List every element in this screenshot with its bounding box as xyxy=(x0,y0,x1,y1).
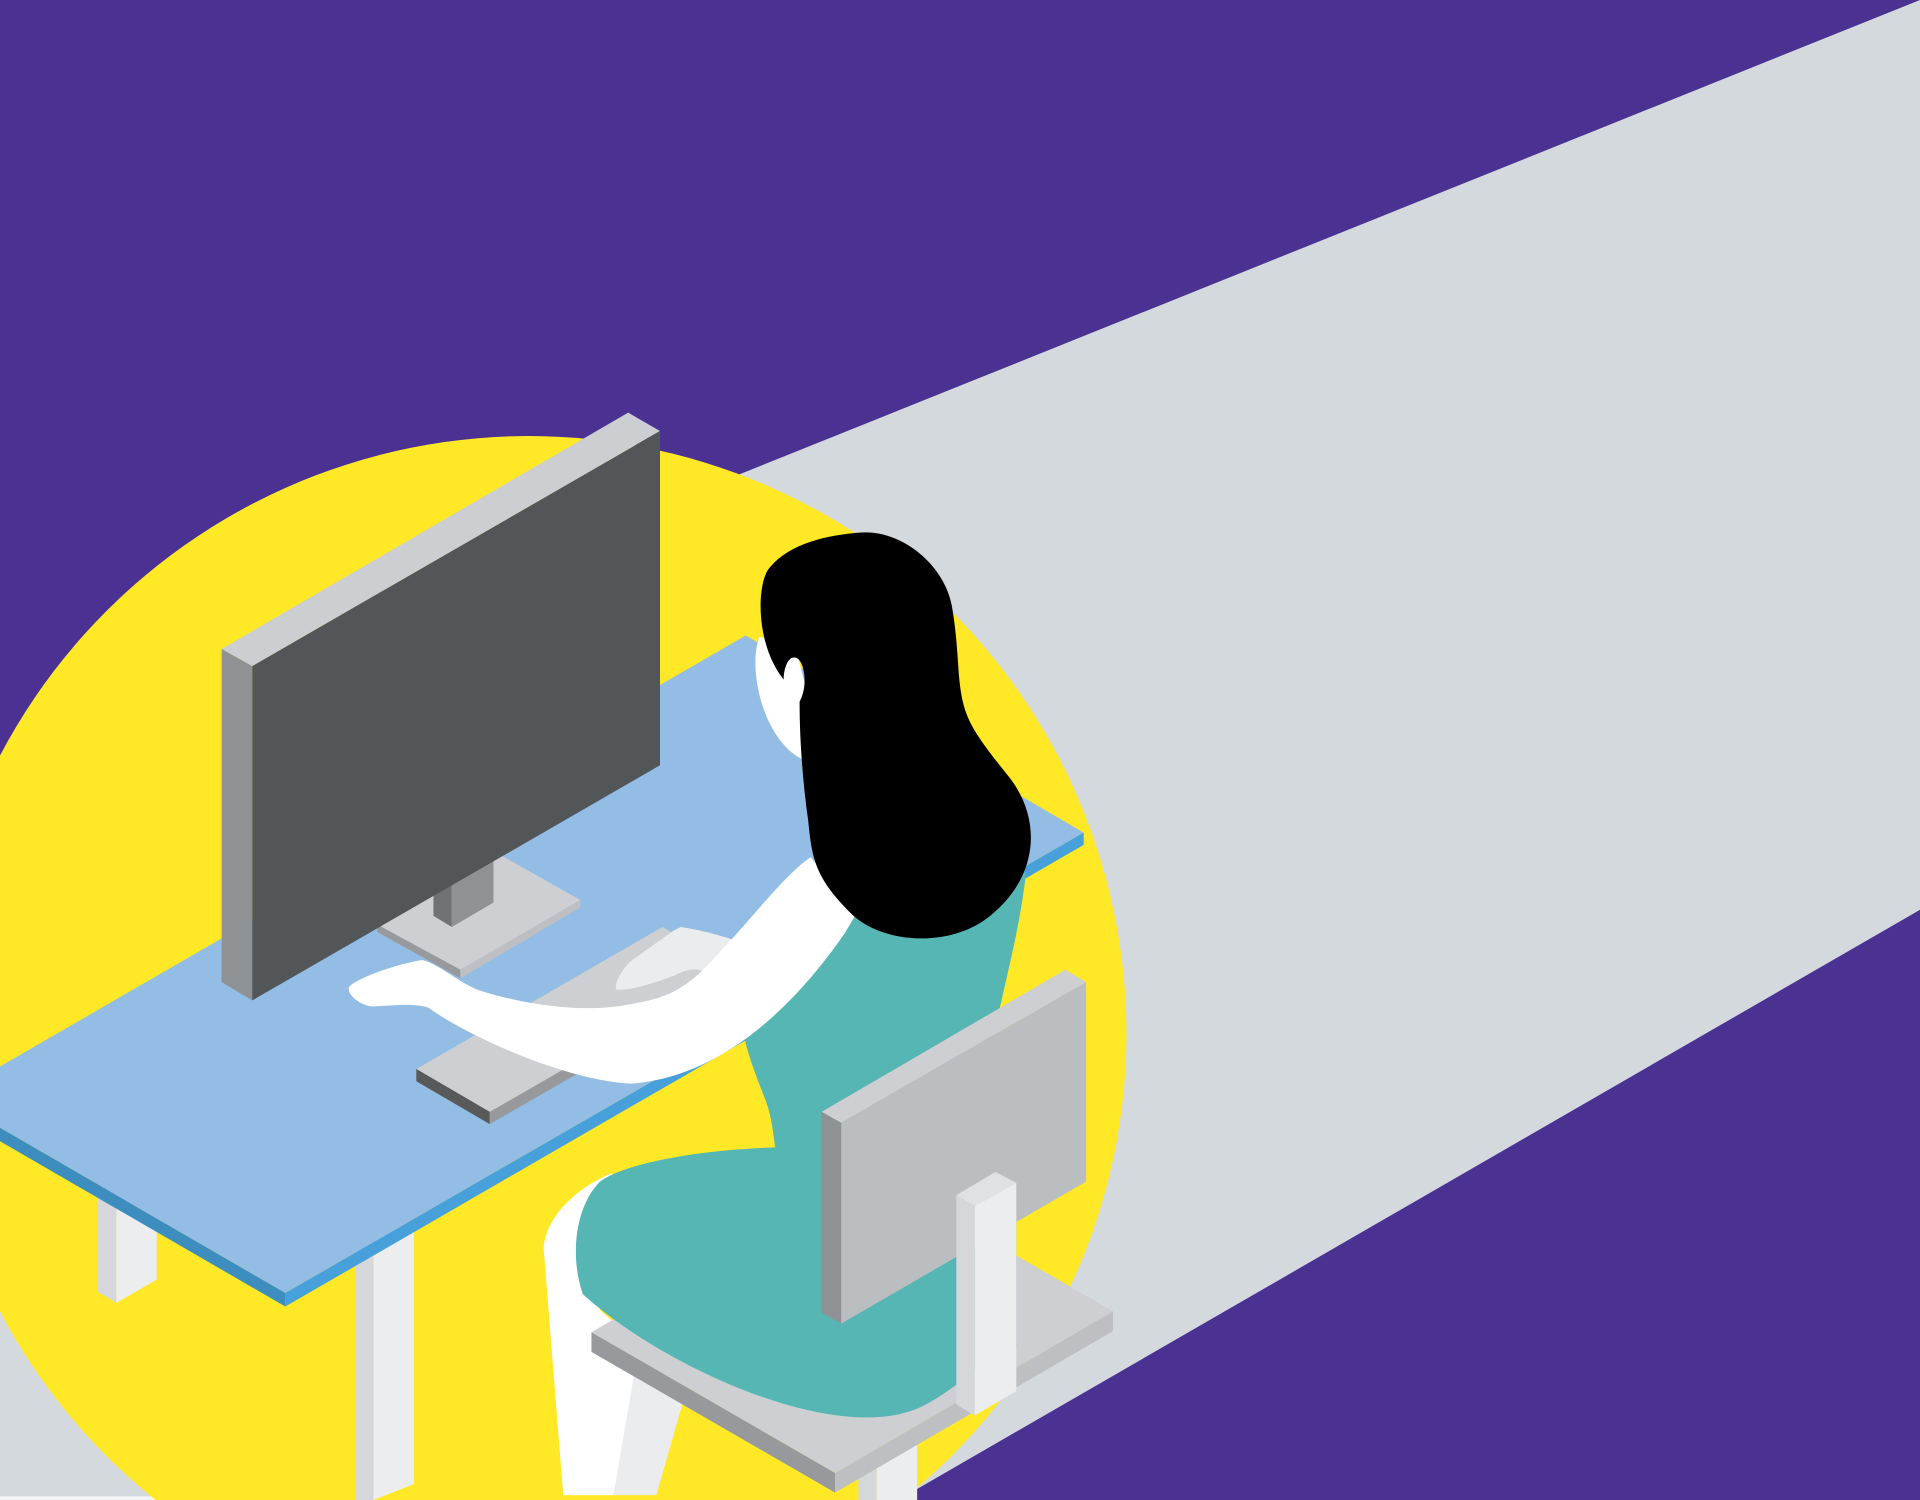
bottom edge strip xyxy=(0,1496,159,1500)
far hand xyxy=(616,927,738,990)
chair leg xyxy=(858,1433,917,1500)
chair seat xyxy=(591,1171,1113,1493)
keyboard xyxy=(416,927,747,1124)
monitor xyxy=(222,413,660,1000)
desk top xyxy=(0,636,1084,1307)
yellow circle xyxy=(0,436,1126,1500)
teal body xyxy=(576,872,1026,1417)
desk leg: back left xyxy=(98,1188,157,1303)
face xyxy=(755,637,818,759)
white leg xyxy=(544,1173,688,1495)
desk leg: front xyxy=(355,1224,414,1500)
chair back xyxy=(822,970,1086,1324)
monitor stand xyxy=(377,833,580,978)
chair post xyxy=(956,1172,1016,1416)
hair xyxy=(761,532,1031,938)
arm xyxy=(349,857,857,1084)
